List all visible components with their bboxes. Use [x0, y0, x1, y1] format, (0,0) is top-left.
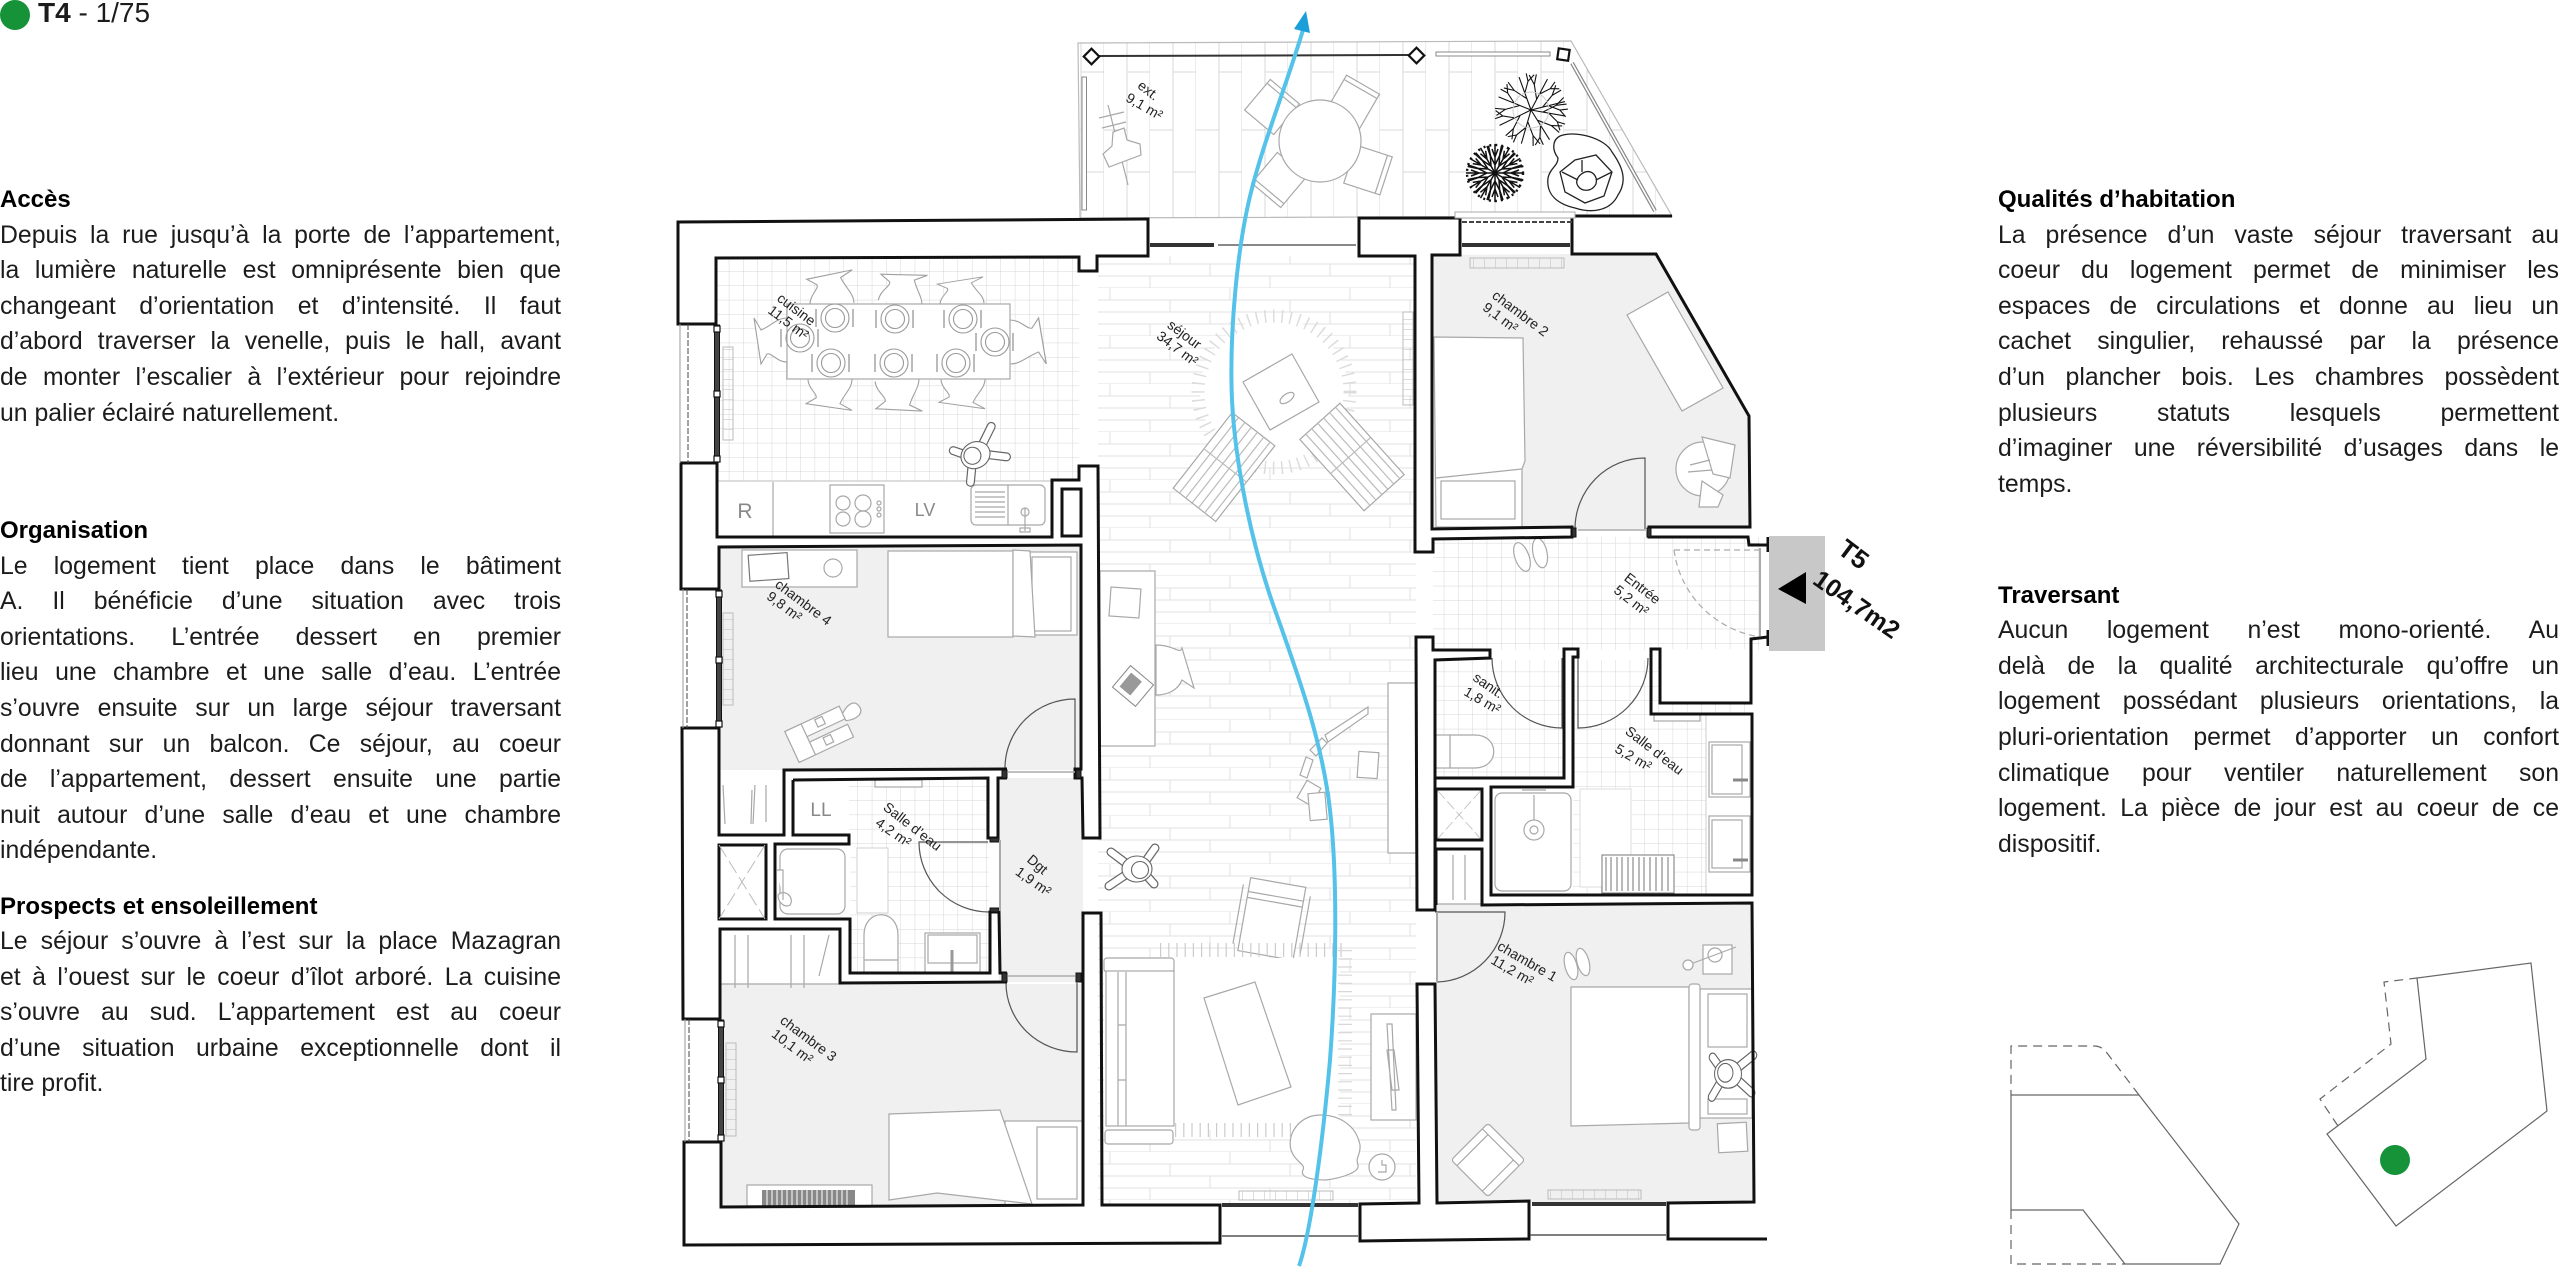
potted plant	[1548, 134, 1623, 211]
label: sanitaire	[1461, 669, 1507, 717]
body: Qualités d'habitation: La présence d’un vaste séjour traversant au	[1998, 222, 2559, 249]
large rug	[1104, 950, 1345, 1130]
body: Traversant: logement possédant plusieurs orientations, la	[1998, 688, 2559, 715]
heading: Traversant: Traversant	[1998, 582, 2119, 609]
kitchen person	[951, 426, 1010, 482]
living room furniture	[1100, 316, 1416, 1180]
body: Accès: Depuis la rue jusqu’à la porte de l’appartement,	[0, 222, 561, 249]
scattered objects	[1297, 707, 1379, 821]
body: Traversant: pluri-orientation permet d’apporter un confort	[1998, 724, 2559, 751]
label: chambre 2: chambre 2	[1489, 287, 1552, 340]
wall: south-west	[684, 913, 1220, 1245]
body: Organisation: s’ouvre ensuite sur un large séjour traversant	[0, 695, 561, 722]
text block: Qualités d'habitation	[1998, 186, 2559, 498]
body: Accès: la lumière naturelle est omniprésente bien que	[0, 257, 561, 284]
arrow: through-ventilation line	[1231, 11, 1335, 1266]
label: dégagement: 1,9 m²	[1013, 863, 1055, 899]
body: Accès: d’abord traverser la venelle, puis le hall, avant	[0, 328, 561, 355]
heading: Qualités d'habitation: Qualités d’habitation	[1998, 186, 2235, 213]
label: cuisine	[765, 290, 819, 343]
label: entrée: Entrée	[1621, 569, 1664, 607]
salle d'eau 4,2 fixtures	[775, 780, 980, 973]
TV unit	[1371, 1014, 1416, 1120]
text block: Organisation	[0, 517, 561, 864]
entry marker	[1769, 533, 1905, 651]
walls	[678, 216, 1768, 1245]
icon: green location dot	[2380, 1145, 2410, 1175]
round table with chairs	[1245, 75, 1392, 208]
radiators	[723, 258, 1641, 1200]
label: chambre 1: 11,2 m²	[1488, 952, 1537, 989]
closets	[719, 655, 1733, 988]
label: salle d'eau 4,2: Salle d’eau	[880, 799, 945, 854]
label: salle d'eau 4,2: 4,2 m²	[873, 814, 915, 850]
body: Traversant	[1998, 617, 2560, 858]
body: Qualités d'habitation: coeur du logement permet de minimiser les	[1998, 257, 2559, 284]
bed	[1434, 337, 1525, 527]
label: sanitaire: 1,8 m²	[1461, 683, 1504, 717]
wall: séjour north block	[1359, 218, 1572, 552]
sanitaire and salle d'eau 5,2 fixtures	[1436, 649, 1751, 895]
tree small	[1466, 144, 1524, 202]
body: Prospects et ensoleillement: Le séjour s’ouvre à l’est sur la place Mazagran	[0, 928, 561, 955]
cooktop	[830, 485, 884, 533]
deck chair right	[1300, 403, 1404, 511]
grey entry box	[1769, 536, 1825, 651]
windows	[680, 212, 1760, 1236]
body: Qualités d'habitation: d’imaginer une réversibilité d’usages dans le	[1998, 435, 2559, 462]
wall: shaft east	[1436, 789, 1482, 840]
label: dishwasher: LV	[915, 500, 935, 520]
body: Traversant: climatique pour ventiler naturellement son	[1998, 760, 2559, 787]
label: sanitaire: sanit.	[1470, 669, 1507, 701]
kitchen sink	[971, 485, 1045, 532]
body: Organisation: de l’appartement, dessert ensuite une partie	[0, 766, 561, 793]
wall: north-west	[678, 219, 1148, 324]
desk	[1627, 292, 1723, 411]
body: Prospects et ensoleillement: s’ouvre au sud. L’appartement est au coeur	[0, 999, 561, 1026]
body: Qualités d'habitation: d’un plancher bois. Les chambres possèdent	[1998, 364, 2559, 391]
body: Accès: de monter l’escalier à l’extérieur pour rejoindre	[0, 364, 561, 391]
body: Organisation	[0, 553, 561, 864]
label: chambre 3: chambre 3	[777, 1012, 840, 1065]
chambre 1 furniture	[1451, 945, 1753, 1197]
round rug	[1198, 316, 1350, 468]
armchair	[1232, 877, 1312, 961]
door jambs	[990, 528, 1651, 982]
wall: sanitary block	[1416, 630, 1768, 910]
body: Qualités d'habitation: cachet singulier, rehaussé par la présence	[1998, 328, 2559, 355]
body: Organisation: orientations. L’entrée dessert en premier	[0, 624, 561, 651]
kitchen counter and appliances	[718, 481, 1052, 537]
coffee table	[1243, 354, 1319, 430]
label: chambre 4: chambre 4	[772, 576, 835, 629]
label: dégagement: Dgt	[1024, 851, 1051, 877]
label: chambre 4: 9,8 m²	[764, 588, 806, 625]
sofa	[1104, 958, 1174, 1144]
console	[1388, 683, 1416, 853]
label: entrée	[1611, 569, 1664, 619]
bookshelf	[747, 1185, 872, 1206]
wall: service core	[682, 728, 1007, 1019]
body: Qualités d'habitation	[1998, 222, 2559, 498]
door swings	[919, 458, 1648, 1052]
bed	[1700, 989, 1752, 1118]
body: Qualités d'habitation: espaces de circulations et donne au lieu un	[1998, 293, 2559, 320]
body: Traversant: Aucun logement n’est mono-orienté. Au	[1998, 617, 2559, 644]
label: chambre 2: 9,1 m²	[1480, 299, 1522, 336]
room floors	[716, 254, 1760, 1206]
label: cuisine: 11,5 m²	[765, 302, 812, 343]
heading: Prospects et ensoleillement: Prospects et ensoleillement	[0, 892, 317, 920]
T5 label: T5	[1832, 533, 1875, 575]
chambre 4 furniture	[742, 550, 1077, 762]
side table	[1369, 1154, 1395, 1180]
label: chambre 3: 10,1 m²	[769, 1026, 817, 1067]
balcony deck floor	[1078, 41, 1672, 218]
desk	[1100, 571, 1155, 746]
body: Organisation: Le logement tient place dans le bâtiment	[0, 553, 561, 580]
heading: Organisation: Organisation	[0, 517, 148, 544]
T5 area: 104,7m2	[1808, 565, 1905, 645]
wall: kitchen and chambre 4	[681, 463, 1100, 838]
label: séjour: séjour	[1165, 316, 1205, 352]
body: Organisation: lieu une chambre et une salle d’eau. L’entrée	[0, 659, 561, 686]
text block: Prospects et ensoleillement	[0, 892, 561, 1097]
armchair	[1451, 1123, 1525, 1197]
body: Prospects et ensoleillement	[0, 928, 561, 1097]
label: salle d'eau 5,2: Salle d’eau	[1622, 723, 1687, 778]
body: Prospects et ensoleillement: tire profit.	[0, 1070, 103, 1097]
shaft cross east	[1438, 791, 1480, 838]
person standing	[1109, 848, 1155, 886]
label: chambre 1: chambre 1	[1495, 938, 1560, 985]
room labels	[764, 77, 1687, 1067]
label: balcony: 9,1 m²	[1123, 89, 1166, 123]
label: entrée: 5,2 m²	[1611, 582, 1652, 619]
body: Qualités d'habitation: temps.	[1998, 471, 2072, 498]
kitchen cabinet shaft	[1062, 489, 1081, 536]
label: balcony: ext.	[1135, 77, 1162, 103]
desk	[742, 550, 857, 587]
body: Organisation: donnant sur un balcon. Ce séjour, au coeur	[0, 731, 561, 758]
body: Qualités d'habitation: plusieurs statuts lesquels permettent	[1998, 400, 2559, 427]
low table	[1204, 982, 1291, 1105]
wall: chambre 1	[1360, 849, 1767, 1241]
plan title with green marker	[0, 0, 150, 30]
body: Accès: un palier éclairé naturellement.	[0, 400, 339, 427]
tree large	[1491, 70, 1570, 150]
body: Traversant: dispositif.	[1998, 831, 2101, 858]
text block: Accès	[0, 186, 561, 427]
wall: chambre 2 outline	[1572, 216, 1768, 552]
body: Accès	[0, 222, 561, 427]
label: salle d'eau 5,2: 5,2 m²	[1612, 740, 1655, 774]
label: cuisine: cuisine	[774, 290, 819, 329]
lounge chair	[1290, 1115, 1360, 1180]
balcony	[1078, 41, 1672, 218]
text block: Traversant	[1998, 582, 2560, 858]
label: fridge: R	[737, 500, 753, 523]
site diagram: location key	[2320, 963, 2547, 1226]
wall: technical shaft	[719, 845, 766, 919]
icon: green dot	[0, 0, 30, 30]
label: séjour: 34,7 m²	[1154, 328, 1202, 369]
box	[1717, 1122, 1748, 1153]
nightstand and lamp	[1703, 945, 1732, 974]
desk chair	[1156, 645, 1194, 695]
shaft cross	[719, 845, 765, 919]
body: Traversant: logement. La pièce de jour est au coeur de ce	[1998, 795, 2559, 822]
kitchen table with chairs	[754, 267, 1046, 416]
body: Prospects et ensoleillement: et à l’ouest sur le coeur d’îlot arboré. La cuisine	[0, 964, 561, 991]
lounge chair	[785, 698, 870, 762]
deck chair left	[1173, 413, 1275, 521]
entrance door swing	[1674, 550, 1760, 637]
shoes	[1562, 951, 1580, 981]
entrée shoes	[1510, 537, 1550, 573]
chambre 3 furniture	[747, 1110, 1083, 1206]
bed	[1023, 552, 1077, 635]
arrow: entry triangle	[1778, 572, 1806, 604]
body: Traversant: delà de la qualité architecturale qu’offre un	[1998, 653, 2559, 680]
body: Accès: changeant d’orientation et d’intensité. Il faut	[0, 293, 561, 320]
person resting	[1712, 1055, 1753, 1097]
body: Prospects et ensoleillement: d’une situation urbaine exceptionnelle dont il	[0, 1035, 561, 1062]
balcony railing	[1082, 48, 1655, 211]
site diagram: building footprint	[2011, 1046, 2239, 1264]
lounger	[1099, 105, 1141, 185]
chambre 2 furniture	[1434, 292, 1735, 527]
round stool with plant	[1676, 442, 1730, 496]
heading: Accès: Accès	[0, 186, 71, 213]
body: Organisation: indépendante.	[0, 837, 157, 864]
body: Organisation: nuit autour d’une salle d’eau et une chambre	[0, 802, 561, 829]
label: washing machine: LL	[810, 800, 832, 821]
bed	[1005, 1121, 1083, 1205]
body: Organisation: A. Il bénéficie d’une situation avec trois	[0, 588, 561, 615]
